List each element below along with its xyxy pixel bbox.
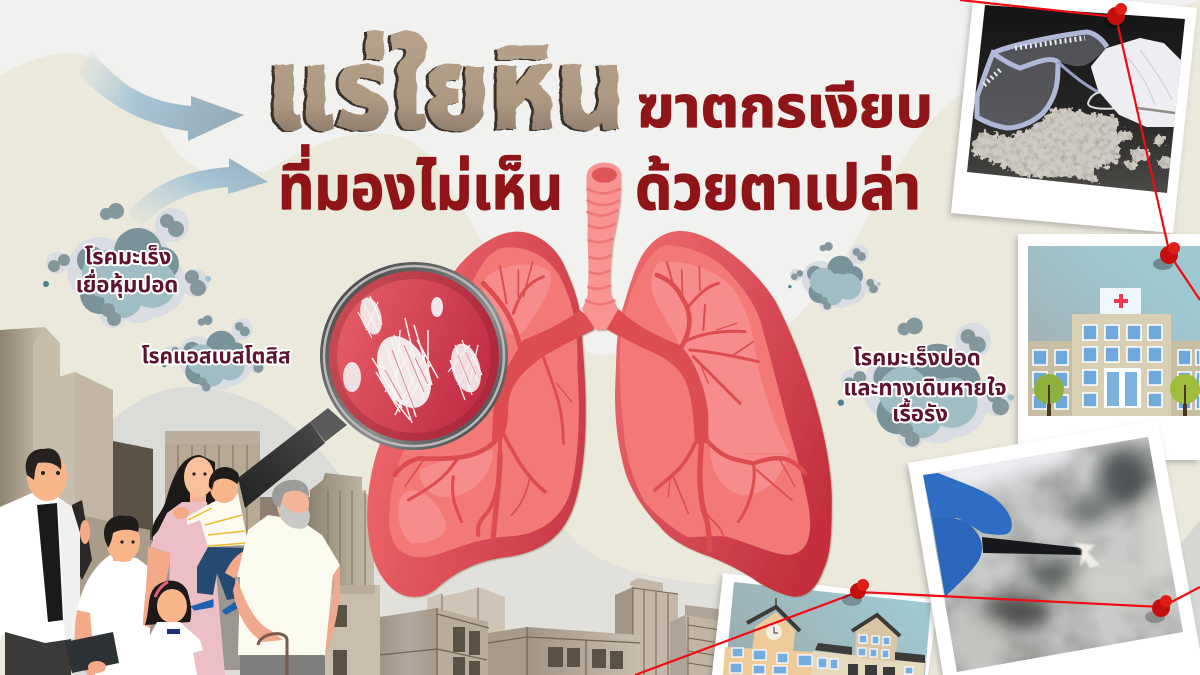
goggles: [977, 32, 1107, 128]
lens with asbestos fibres: [320, 262, 508, 450]
mother: [143, 455, 225, 675]
left lung: [367, 232, 596, 597]
handle: [238, 408, 347, 508]
label: โรคมะเร็งปอดและทางเดินหายใจเรื้อรัง: โรคมะเร็งปอด: [853, 345, 981, 370]
smoke cloud: decorative right: [788, 242, 881, 311]
toddler in mother's arms: [173, 467, 247, 613]
arrow: lower blue arrow: [128, 158, 268, 227]
smoke cloud: lung cancer and COPD: [838, 318, 1014, 449]
boy with briefcase: [65, 515, 150, 675]
right lung: [605, 231, 832, 597]
photo: mask, goggles and asbestos pile: [951, 0, 1197, 233]
title: ด้วยตาเปล่า: ด้วยตาเปล่า: [635, 154, 921, 223]
asbestos pile: [972, 107, 1172, 182]
label: โรคมะเร็งเยื่อหุ้มปอด: โรคมะเร็ง: [85, 244, 171, 269]
arrow: upper blue arrow: [78, 50, 244, 141]
title: ฆาตกรเงียบ: ฆาตกรเงียบ: [637, 75, 933, 140]
smoke cloud: pleural mesothelioma: [43, 203, 211, 328]
tweezers: [982, 537, 1082, 555]
buildings: left skyline: [0, 327, 330, 670]
push pin 4: [1145, 595, 1172, 623]
red string: [635, 0, 1200, 675]
photo: school: [712, 573, 938, 675]
push pin 3: [842, 579, 869, 606]
glove fingers: [923, 473, 1012, 535]
grandfather with cane: [233, 480, 340, 675]
asbestos fibre: [1073, 543, 1100, 568]
trees: [1047, 404, 1187, 416]
lungs illustration: [367, 163, 832, 597]
label: โรคมะเร็งปอดและทางเดินหายใจเรื้อรัง: และทางเดินหายใจ: [843, 375, 1007, 400]
photo: tweezers holding asbestos fibre: [908, 420, 1200, 675]
label: โรคมะเร็งปอดและทางเดินหายใจเรื้อรัง: [843, 345, 1007, 426]
smoke cloud: asbestosis: [162, 315, 266, 393]
red cross: [1114, 294, 1128, 308]
magnifying glass: [238, 262, 508, 508]
label: โรคมะเร็งเยื่อหุ้มปอด: เยื่อหุ้มปอด: [76, 269, 178, 298]
father: [0, 448, 92, 675]
mask: [1088, 40, 1180, 125]
label: โรคมะเร็งปอดและทางเดินหายใจเรื้อรัง: เรื้อรัง: [892, 398, 948, 426]
label: โรคมะเร็งเยื่อหุ้มปอด: [76, 244, 178, 298]
push pin 2: [1153, 242, 1180, 270]
family group: [0, 448, 340, 675]
title: ที่มองไม่เห็น: ที่มองไม่เห็น: [278, 144, 563, 223]
label: โรคแอสเบสโตสิส: โรคแอสเบสโตสิส: [141, 345, 291, 368]
buildings: centre skyline: [310, 473, 722, 675]
title: แร่ใยหิน: แร่ใยหิน: [267, 27, 625, 152]
push pin 1: [1104, 3, 1127, 28]
girl: [137, 581, 203, 675]
trachea: [582, 163, 621, 330]
photo: hospital: [1018, 234, 1200, 460]
